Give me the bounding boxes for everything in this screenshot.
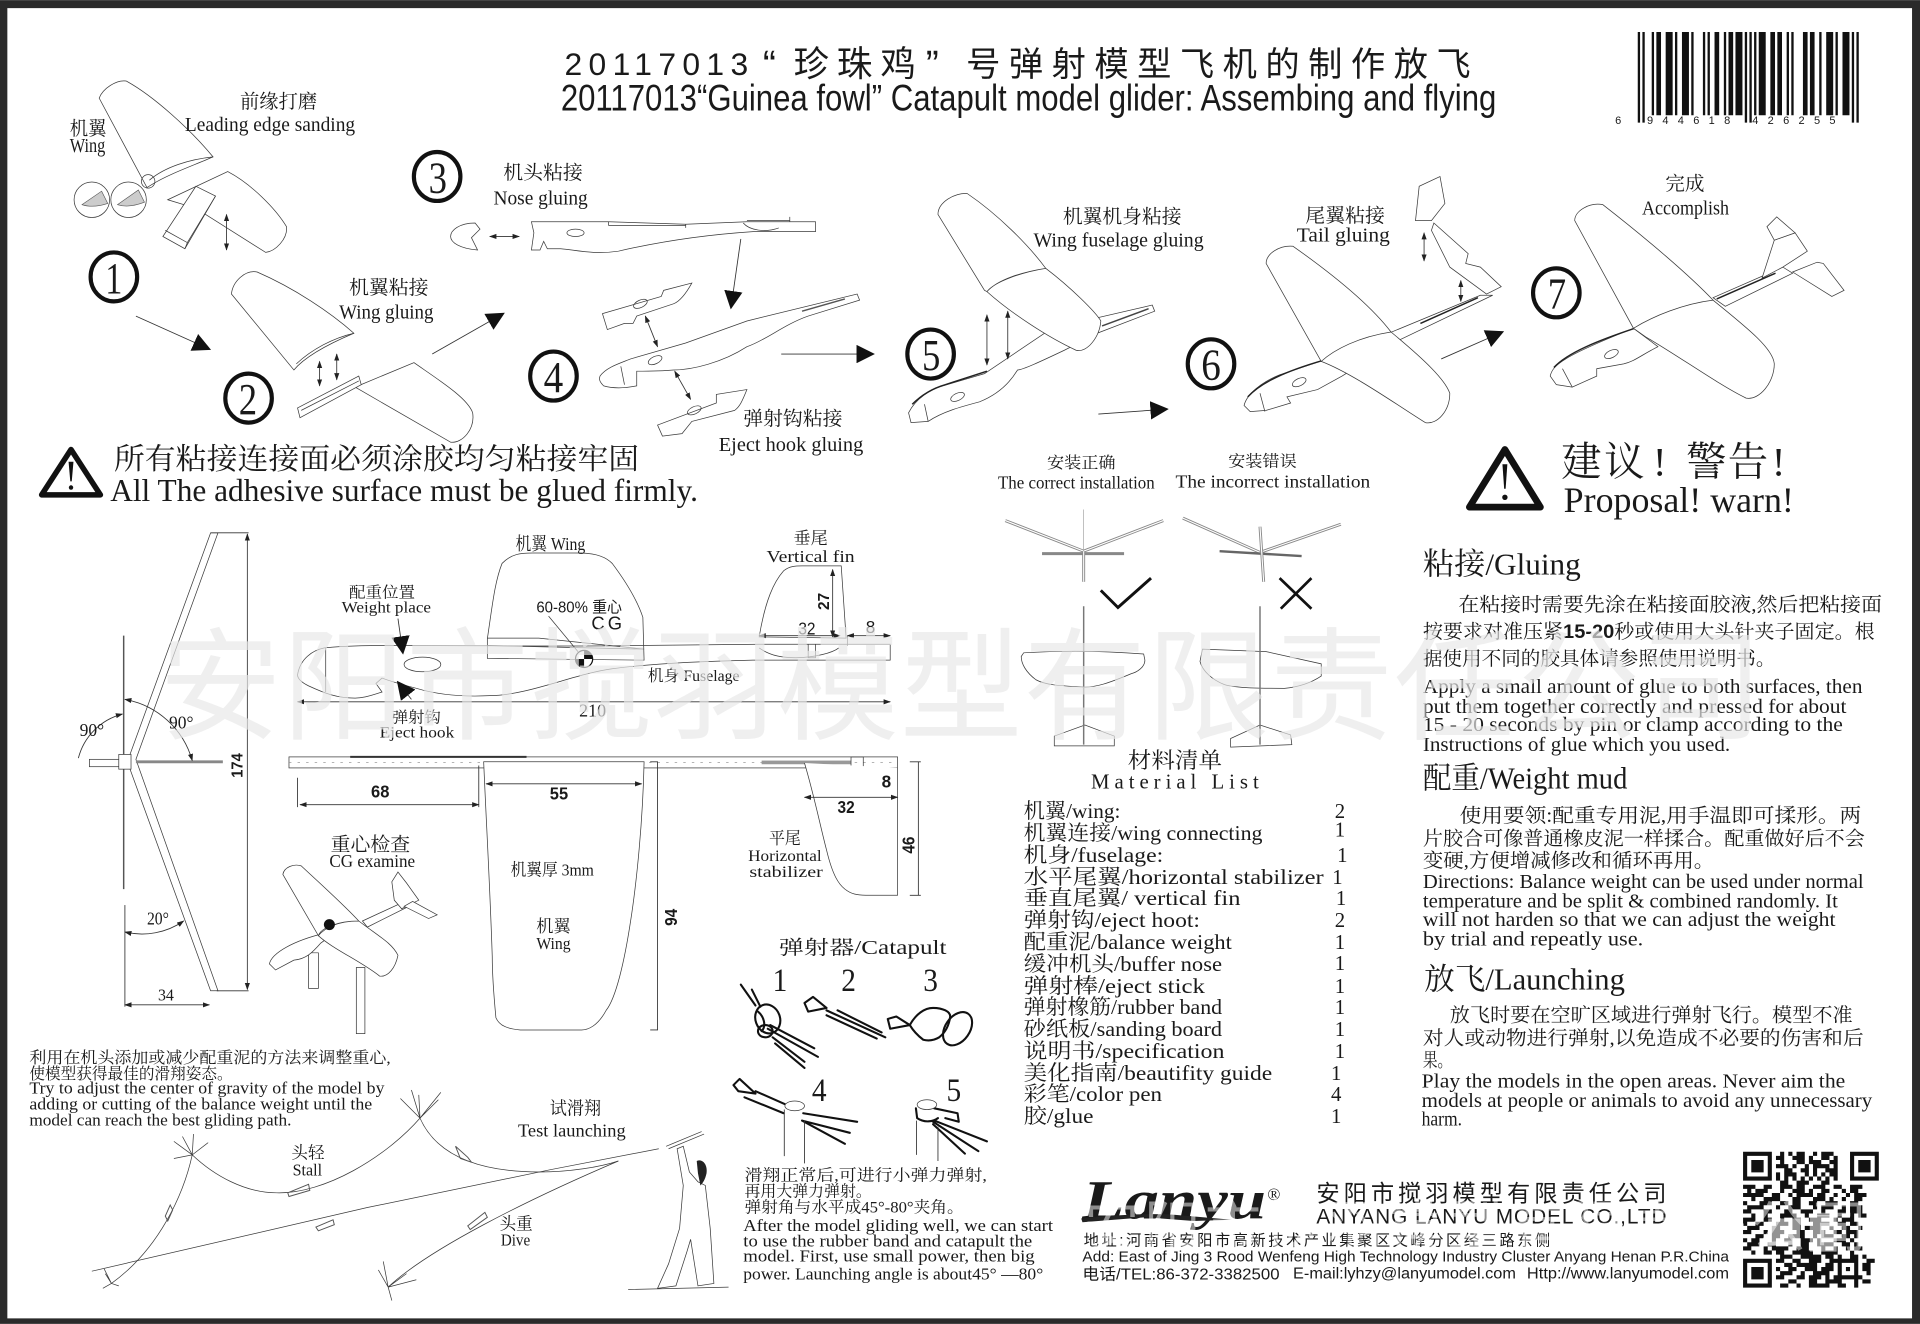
step 7 number bbox=[1533, 268, 1580, 319]
label: test launching: Test launching bbox=[518, 1120, 626, 1140]
label: wing bbox=[70, 118, 107, 157]
label: dive bbox=[500, 1215, 533, 1249]
title bbox=[561, 43, 1496, 118]
dimensions: 94 bbox=[661, 908, 681, 926]
material items: 机翼/wing: bbox=[1024, 799, 1120, 823]
arrow 4 to 5 bbox=[781, 353, 873, 355]
step 3: nose gluing bbox=[414, 152, 816, 253]
step 6 number bbox=[1188, 339, 1234, 390]
step 7 number: 7 bbox=[1548, 270, 1566, 319]
catapult step numbers: 5 bbox=[947, 1073, 961, 1109]
launching text: 放飞时要在空旷区域进行弹射飞行。模型不准 bbox=[1450, 1004, 1853, 1026]
wing and stabilizer plan drawing bbox=[289, 757, 921, 1030]
title: 20117013“Guinea fowl” Catapult model glider: Assembing and flying bbox=[561, 77, 1496, 118]
step 3 nose piece bbox=[451, 223, 480, 250]
step 6 tail parts bbox=[1416, 176, 1501, 301]
dimension 174: 174 bbox=[229, 753, 246, 778]
arrow 5 to 6 bbox=[1098, 409, 1167, 414]
label: stall bbox=[291, 1144, 325, 1180]
label: wing: Wing bbox=[70, 136, 105, 157]
company contact details: 地址:河南省安阳市高新技术产业集聚区文峰分区经三路东侧 bbox=[1084, 1232, 1550, 1249]
label: test launching: 试滑翔 bbox=[550, 1098, 601, 1118]
dimensions: 8 bbox=[882, 772, 891, 792]
material list heading: 材料清单 bbox=[1128, 748, 1222, 773]
barcode bbox=[1615, 32, 1859, 127]
step 4 number bbox=[530, 352, 577, 402]
gluing text: put them together correctly and pressed for about bbox=[1423, 697, 1847, 718]
step 1: leading edge sanding bbox=[70, 81, 355, 303]
label: accomplish bbox=[1642, 173, 1729, 219]
material items: 1 bbox=[1331, 1061, 1341, 1085]
icon: warning triangle bbox=[1469, 450, 1540, 507]
dimensions bbox=[298, 762, 921, 1030]
fin dimensions: 8 bbox=[866, 617, 875, 637]
step 1 section circles bbox=[74, 175, 155, 218]
weight mud text: 变硬,方便增减修改和循环再用。 bbox=[1423, 850, 1714, 872]
step 5 wing bbox=[938, 194, 1101, 351]
panel: launching instructions bbox=[1422, 963, 1872, 1130]
heading: gluing: 粘接/Gluing bbox=[1423, 547, 1581, 581]
label: stall: Stall bbox=[293, 1161, 322, 1180]
title: 珍珠鸡 bbox=[793, 44, 916, 84]
label: vertical fin: Vertical fin bbox=[767, 547, 855, 566]
label: vertical fin: 垂尾 bbox=[793, 529, 828, 548]
label: weight place bbox=[342, 585, 431, 616]
material items: 机身/fuselage: bbox=[1024, 843, 1163, 867]
QR code washed-out area bbox=[1768, 1215, 1837, 1252]
step 2 wing halves and spar bbox=[231, 272, 473, 442]
label: incorrect installation: 安装错误 bbox=[1228, 453, 1297, 471]
dimension 174 bbox=[211, 533, 249, 991]
step 3 double arrow bbox=[490, 235, 519, 237]
dimensions: 55 bbox=[550, 784, 569, 804]
icon: warning triangle bbox=[42, 450, 100, 495]
material items: 彩笔/color pen bbox=[1024, 1082, 1163, 1106]
company contact details bbox=[1082, 1232, 1730, 1284]
angle labels: 90° bbox=[169, 713, 193, 733]
CG examine bbox=[269, 834, 437, 1034]
stands bbox=[309, 953, 365, 1034]
label: wing fuselage gluing: Wing fuselage gluing bbox=[1033, 230, 1204, 251]
weight mud text: temperature and be split & combined randomly. It bbox=[1423, 892, 1839, 913]
gluing text: 据使用不同的胶具体请参照使用说明书。 bbox=[1423, 648, 1776, 670]
gluing text: Instructions of glue which you used. bbox=[1423, 735, 1730, 756]
dimension 210: 210 bbox=[579, 700, 606, 720]
fin dimensions: 32 bbox=[798, 618, 816, 638]
gluing text: 在粘接时需要先涂在粘接面胶液,然后把粘接面 bbox=[1458, 594, 1882, 616]
impact bursts bbox=[103, 1090, 441, 1301]
angle labels: 90° bbox=[80, 720, 104, 740]
launching text: 果。 bbox=[1423, 1050, 1452, 1072]
proposal text: 建议!警告! bbox=[1561, 439, 1785, 484]
material items: 水平尾翼/horizontal stabilizer bbox=[1024, 865, 1324, 889]
material items: 弹射棒/eject stick bbox=[1024, 974, 1206, 998]
step 4 post bbox=[784, 1101, 804, 1163]
title: ” bbox=[926, 43, 939, 86]
label: test launching bbox=[518, 1098, 626, 1140]
weight mud text: 片胶合可像普通橡皮泥一样揉合。配重做好后不会 bbox=[1423, 828, 1865, 850]
arrow 2 to 3 bbox=[432, 314, 503, 354]
diagram: incorrect top view bbox=[1200, 606, 1321, 747]
warning text: All The adhesive surface must be glued firmly. bbox=[110, 473, 698, 508]
material items: 1 bbox=[1335, 974, 1345, 998]
material items: 1 bbox=[1337, 843, 1348, 867]
material items: 1 bbox=[1335, 995, 1345, 1019]
warning: glue firmly bbox=[42, 443, 698, 508]
label: accomplish: 完成 bbox=[1665, 173, 1704, 195]
step 4: eject hook gluing bbox=[530, 283, 863, 456]
material items: 弹射钩/eject hoot: bbox=[1024, 908, 1200, 932]
CG adjustment note: adding or cutting of the balance weight until the bbox=[29, 1095, 372, 1114]
material items: 砂纸板/sanding board bbox=[1024, 1017, 1223, 1041]
step 3 number bbox=[414, 152, 460, 202]
catapult heading: 弹射器/Catapult bbox=[779, 937, 947, 959]
label: weight place: Weight place bbox=[342, 599, 431, 616]
step 5 number: 5 bbox=[922, 331, 940, 380]
label: wing gluing: Wing gluing bbox=[339, 303, 434, 324]
step 1 knot bbox=[741, 985, 818, 1068]
step 2 number: 2 bbox=[239, 375, 257, 424]
catapult launching note bbox=[743, 1167, 1053, 1284]
step 4 double arrows bbox=[645, 316, 691, 399]
label: leading edge sanding: Leading edge sanding bbox=[185, 115, 355, 136]
warning text bbox=[110, 443, 698, 508]
company contact details: E-mail:lyhzy@lanyumodel.com bbox=[1293, 1266, 1516, 1283]
step 6 number: 6 bbox=[1201, 341, 1221, 390]
fuselage plan bar bbox=[289, 757, 898, 768]
label: wing fuselage gluing: 机翼机身粘接 bbox=[1063, 206, 1182, 228]
CG examine heading bbox=[329, 834, 415, 871]
step 6 wing bbox=[1266, 246, 1450, 423]
label: nose gluing bbox=[493, 162, 588, 210]
diagram: correct front view bbox=[1005, 510, 1163, 582]
label: correct installation: The correct installation bbox=[998, 473, 1155, 493]
launching text: models at people or animals to avoid any unnecessary bbox=[1422, 1091, 1872, 1112]
top view drawing with dimensions bbox=[78, 533, 249, 1007]
warning: proposal bbox=[1469, 439, 1794, 520]
material list heading: Material List bbox=[1091, 770, 1259, 794]
catapult step numbers: 2 bbox=[841, 963, 856, 999]
material items: 美化指南/beautifity guide bbox=[1024, 1061, 1272, 1085]
company name: ANYANG LANYU MODEL CO.,LTD bbox=[1316, 1205, 1667, 1228]
material items: 垂直尾翼/ vertical fin bbox=[1024, 886, 1241, 910]
panel: weight mud instructions bbox=[1423, 762, 1865, 950]
company contact details: Http://www.lanyumodel.com bbox=[1527, 1266, 1729, 1283]
catapult launching note: 再用大弹力弹射。 bbox=[744, 1182, 872, 1200]
CG adjustment note bbox=[29, 1048, 391, 1129]
CG adjustment note: 使模型获得最佳的滑翔姿态。 bbox=[29, 1064, 233, 1083]
label: wing thickness: 机翼厚 3mm bbox=[511, 861, 595, 880]
label: dive: Dive bbox=[501, 1230, 530, 1249]
material items bbox=[1024, 799, 1348, 1128]
weight mud text: Directions: Balance weight can be used under normal bbox=[1423, 872, 1864, 893]
glider balanced on stands bbox=[269, 865, 437, 976]
catapult step numbers: 1 bbox=[773, 963, 787, 999]
angle labels bbox=[78, 699, 193, 1007]
gluing text bbox=[1423, 594, 1882, 756]
step 4 fuselage bbox=[600, 294, 860, 388]
warning text: 所有粘接连接面必须涂胶均匀粘接牢固 bbox=[114, 443, 639, 476]
catapult launching note: model. First, use small power, then big bbox=[743, 1246, 1035, 1265]
step 6 fuselage bbox=[1244, 295, 1493, 412]
weight mud text bbox=[1423, 805, 1865, 950]
label: wing gluing: 机翼粘接 bbox=[349, 277, 429, 299]
fuselage details bbox=[326, 636, 847, 692]
watermark: 安阳市搅羽模型有限责任公司 bbox=[1084, 1196, 1867, 1259]
step 5 post bbox=[917, 1100, 938, 1161]
label: weight place: 配重位置 bbox=[349, 585, 415, 602]
material items: 4 bbox=[1331, 1082, 1342, 1106]
material items: 缓冲机头/buffer nose bbox=[1024, 952, 1222, 976]
label: eject hook gluing: Eject hook gluing bbox=[719, 435, 863, 456]
step 2 knot bbox=[804, 997, 885, 1039]
company footer bbox=[1081, 1154, 1877, 1286]
step 1 number: 1 bbox=[105, 254, 122, 303]
step 4 post with band bbox=[733, 1079, 857, 1144]
label: tail gluing: Tail gluing bbox=[1297, 225, 1390, 246]
material items: 配重泥/balance weight bbox=[1024, 930, 1232, 954]
wing plan outline bbox=[484, 762, 644, 1030]
dimension 34: 34 bbox=[158, 986, 174, 1005]
QR code bbox=[1743, 1154, 1877, 1286]
gluing text: Apply a small amount of glue to both surfaces, then bbox=[1423, 677, 1863, 698]
label: wing gluing bbox=[339, 277, 434, 324]
label: center of gravity: 60-80% 重心 bbox=[536, 598, 622, 616]
title: 20117013 bbox=[564, 46, 748, 82]
step 5 double arrows bbox=[987, 311, 1008, 365]
small gliders on paths bbox=[165, 1146, 487, 1231]
step 1 lower wing and sanding block bbox=[163, 172, 287, 252]
CG adjustment note: 利用在机头添加或减少配重泥的方法来调整重心, bbox=[29, 1048, 391, 1067]
test launching flight paths bbox=[92, 1090, 729, 1301]
label: wing fuselage gluing bbox=[1033, 206, 1204, 251]
step 5 post with band bbox=[916, 1108, 987, 1154]
label: tail gluing bbox=[1297, 205, 1390, 246]
label: horizontal stabilizer: stabilizer bbox=[749, 864, 824, 881]
barcode: 944618 bbox=[1647, 115, 1730, 127]
catapult launching note: to use the rubber band and catapult the bbox=[743, 1232, 1032, 1251]
label: eject hook gluing bbox=[719, 408, 863, 456]
material items: 1 bbox=[1335, 1017, 1345, 1041]
launching text: Play the models in the open areas. Never aim the bbox=[1422, 1072, 1846, 1093]
label: incorrect installation bbox=[1176, 453, 1370, 492]
barcode: 6 bbox=[1615, 115, 1621, 127]
material items: 机翼连接/wing connecting bbox=[1024, 821, 1262, 845]
material items: 说明书/specification bbox=[1024, 1039, 1225, 1063]
label: horizontal stabilizer: Horizontal bbox=[748, 848, 822, 865]
label: wing: Wing bbox=[536, 934, 571, 953]
label: accomplish: Accomplish bbox=[1642, 198, 1729, 219]
label: stall: 头轻 bbox=[291, 1144, 325, 1163]
label: wing bbox=[536, 917, 571, 953]
step 4 lower hook bbox=[658, 390, 747, 436]
correct and incorrect installation bbox=[998, 453, 1370, 747]
dimensions: 32 bbox=[838, 797, 855, 817]
label: vertical fin bbox=[767, 529, 855, 566]
wing side outline bbox=[487, 553, 644, 660]
launching text: 对人或动物进行弹射,以免造成不必要的伤害和后 bbox=[1423, 1028, 1864, 1050]
label: leading edge sanding bbox=[185, 91, 355, 136]
material items: 1 bbox=[1335, 1039, 1345, 1063]
catapult section bbox=[733, 937, 987, 1163]
icon: check mark bbox=[1101, 578, 1151, 608]
catapult step numbers bbox=[773, 963, 961, 1109]
label: wing: 机翼 bbox=[70, 118, 107, 140]
catapult launching note: 滑翔正常后,可进行小弹力弹射, bbox=[744, 1167, 987, 1185]
title: 号弹射模型飞机的制作放飞 bbox=[966, 46, 1471, 84]
step 5 fuselage bbox=[909, 305, 1155, 423]
step 5 number bbox=[907, 330, 954, 380]
dimension 34 bbox=[125, 986, 209, 1005]
label: center of gravity: CG bbox=[591, 613, 622, 634]
vertical fin outline bbox=[759, 566, 846, 638]
company name: 安阳市搅羽模型有限责任公司 bbox=[1316, 1180, 1667, 1206]
CG examine heading: CG examine bbox=[329, 851, 415, 871]
dimensions: 68 bbox=[371, 781, 389, 801]
label: correct installation: 安装正确 bbox=[1047, 454, 1116, 472]
step 6: tail gluing bbox=[1188, 176, 1501, 423]
catapult launching note: power. Launching angle is about45° —80° bbox=[743, 1265, 1043, 1284]
label: horizontal stabilizer: 平尾 bbox=[769, 829, 801, 848]
weight mud text: 使用要领:配重专用泥,用手温即可揉形。两 bbox=[1460, 805, 1861, 827]
proposal text bbox=[1561, 439, 1794, 520]
title: “ bbox=[763, 43, 776, 86]
CG adjustment note: model can reach the best gliding path. bbox=[29, 1110, 291, 1129]
label: wing: 机翼 bbox=[536, 917, 571, 936]
company contact details: 电话/TEL:86-372-3382500 bbox=[1082, 1266, 1280, 1284]
dimensions: 46 bbox=[899, 836, 919, 854]
diagram: incorrect front view bbox=[1183, 518, 1341, 582]
step 7: accomplish bbox=[1533, 173, 1844, 398]
step 2: wing gluing bbox=[225, 272, 473, 442]
material items: 弹射橡筋/rubber band bbox=[1024, 995, 1223, 1019]
step 5: wing fuselage gluing bbox=[907, 194, 1204, 423]
material items: 1 bbox=[1335, 930, 1345, 954]
step 7 finished glider bbox=[1550, 204, 1844, 398]
weight mud text: by trial and repeatly use. bbox=[1423, 929, 1643, 950]
watermark bbox=[159, 619, 1867, 1259]
step 3 fuselage bbox=[531, 217, 816, 253]
arrow 3 to 4 bbox=[731, 239, 741, 308]
label: eject hook: Eject hook bbox=[380, 724, 454, 741]
heading: weight mud: 配重/Weight mud bbox=[1423, 762, 1627, 796]
step 2 number bbox=[225, 374, 272, 424]
material list bbox=[1024, 748, 1348, 1128]
arrow 6 to 7 bbox=[1441, 332, 1502, 359]
arrows to weight place and hook bbox=[398, 619, 411, 699]
step 1 number bbox=[91, 252, 137, 303]
material items: 1 bbox=[1335, 951, 1345, 975]
label: nose gluing: 机头粘接 bbox=[503, 162, 583, 184]
label: horizontal stabilizer bbox=[748, 829, 824, 881]
company name bbox=[1316, 1180, 1667, 1228]
material items: 胶/glue bbox=[1024, 1104, 1093, 1128]
material items: 1 bbox=[1336, 886, 1346, 910]
material items: 2 bbox=[1335, 908, 1345, 932]
gluing text: 按要求对准压紧15-20秒或使用大头针夹子固定。根 bbox=[1423, 621, 1875, 643]
fuselage and stabilizer bbox=[89, 636, 223, 889]
proposal text: Proposal! warn! bbox=[1564, 480, 1794, 520]
fuselage outline bbox=[298, 644, 890, 698]
label: tail gluing: 尾翼粘接 bbox=[1305, 205, 1385, 227]
company contact details: Add: East of Jing 3 Rood Wenfeng High Technology Industry Cluster Anyang Henan P.R.China bbox=[1082, 1249, 1730, 1265]
material list heading bbox=[1091, 748, 1259, 794]
step 3 knot bbox=[888, 1007, 978, 1051]
gluing text: 15 - 20 seconds by pin or clamp according to the bbox=[1423, 715, 1843, 736]
person launching glider bbox=[628, 1132, 729, 1290]
label: correct installation bbox=[998, 454, 1155, 493]
icon: cross mark bbox=[1280, 578, 1311, 609]
label: nose gluing: Nose gluing bbox=[493, 189, 588, 210]
material items: 1 bbox=[1331, 1104, 1341, 1128]
side view fuselage drawing bbox=[298, 529, 890, 741]
stabilizer outline bbox=[804, 763, 898, 895]
label: eject hook gluing: 弹射钩粘接 bbox=[743, 408, 843, 430]
weight mud text: will not harden so that we can adjust the weight bbox=[1423, 910, 1836, 931]
flight path curves bbox=[92, 1118, 659, 1287]
catapult step numbers: 3 bbox=[923, 963, 938, 999]
label: eject hook: 弹射钩 bbox=[392, 710, 441, 727]
angle labels: 20° bbox=[147, 909, 169, 929]
CG adjustment note: Try to adjust the center of gravity of the model by bbox=[29, 1079, 385, 1098]
logo: Lanyu: ® bbox=[1267, 1185, 1280, 1204]
center of gravity mark bbox=[549, 616, 593, 668]
launching text bbox=[1422, 1004, 1872, 1130]
material items: 2 bbox=[1335, 799, 1345, 823]
wing chevron bbox=[127, 533, 218, 991]
label: leading edge sanding: 前缘打磨 bbox=[240, 91, 317, 113]
catapult step numbers: 4 bbox=[812, 1073, 827, 1109]
catapult launching note: 弹射角与水平成45°-80°夹角。 bbox=[744, 1198, 964, 1216]
label: dive: 头重 bbox=[500, 1215, 533, 1234]
step 3 number: 3 bbox=[429, 153, 447, 202]
diagram: correct top view bbox=[1021, 606, 1145, 746]
step 1 wing bbox=[99, 81, 213, 188]
barcode: 426255 bbox=[1752, 115, 1836, 127]
step 4 upper hook bbox=[602, 283, 692, 330]
step 4 number: 4 bbox=[544, 353, 563, 402]
heading: launching: 放飞/Launching bbox=[1424, 963, 1625, 997]
label: center of gravity bbox=[536, 598, 622, 634]
fin dimensions bbox=[759, 570, 890, 638]
launching text: harm. bbox=[1422, 1109, 1462, 1130]
label: fuselage: 机身 Fuselage bbox=[648, 667, 740, 685]
material items: 1 bbox=[1335, 817, 1345, 841]
panel: gluing instructions bbox=[1423, 547, 1882, 756]
material items: 1 bbox=[1332, 865, 1343, 889]
fin dimensions: 27 bbox=[816, 593, 833, 610]
logo: Lanyu: Lanyu bbox=[1081, 1170, 1266, 1231]
arrow 1 to 2 bbox=[136, 316, 209, 349]
label: incorrect installation: The incorrect installation bbox=[1176, 472, 1370, 492]
label: eject hook bbox=[380, 710, 454, 741]
watermark: 安阳市搅羽模型有限责任公司 bbox=[159, 619, 1763, 756]
catapult launching note: After the model gliding well, we can start bbox=[743, 1216, 1053, 1235]
label: wing: 机翼 Wing bbox=[516, 534, 585, 554]
CG examine heading: 重心检查 bbox=[331, 834, 410, 856]
